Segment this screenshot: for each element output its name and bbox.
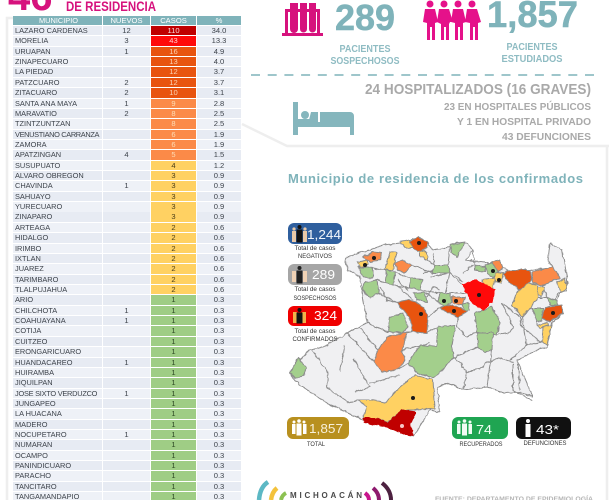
table: casos por municipio: 0.6 [214,264,224,273]
table: casos por municipio: 1 [171,482,176,491]
table: casos por municipio: 43 [169,36,178,45]
table: casos por municipio: 10 [169,88,178,97]
table: casos por municipio: 2 [171,223,176,232]
table: casos por municipio: APATZINGAN [15,150,61,159]
legend: sospechosos: Total de casos [294,286,336,293]
table: casos por municipio: 0.9 [214,181,224,190]
table: casos por municipio: URUAPAN [15,47,51,56]
table: casos por municipio: JUNGAPEO [15,399,56,408]
table: casos por municipio: IRIMBO [15,244,41,253]
table: casos por municipio: 4 [124,150,129,159]
table: casos por municipio: OCAMPO [15,451,48,460]
table: casos por municipio: 0.3 [214,451,224,460]
headline: 46 municipios [8,0,156,16]
table: casos por municipio: 0.3 [214,316,224,325]
stat: 1,857 estudiados [487,0,578,65]
icon: hospital bed [293,102,354,135]
table: casos por municipio: 0.6 [214,254,224,263]
table: casos por municipio: 1 [124,358,129,366]
table: casos por municipio: 13 [169,57,178,66]
badge: total: TOTAL [307,441,325,448]
table: casos por municipio: 1 [171,378,176,387]
table: casos por municipio: 1 [171,368,176,377]
table: casos por municipio: 3.7 [214,78,224,87]
table: casos por municipio: CHAVINDA [15,181,53,190]
table: casos por municipio: LA PIEDAD [15,67,53,76]
table: casos por municipio: 3 [171,171,176,180]
badge: total [287,417,349,448]
table: casos por municipio: 6 [171,130,176,139]
table: casos por municipio: 2 [171,285,176,294]
badge: defunciones: DEFUNCIONES [524,440,566,447]
table: casos por municipio: 1 [171,420,176,429]
table: casos por municipio: HIDALGO [15,233,48,242]
text: hospitalized summary: 43 DEFUNCIONES [502,131,591,143]
table: casos por municipio: NOCUPETARO [15,430,67,439]
table: casos por municipio: ERONGARICUARO [15,347,81,356]
table: casos por municipio: 0.9 [214,212,224,221]
table: casos por municipio: 2 [171,233,176,242]
table: casos por municipio: 0.3 [214,378,224,387]
table: casos por municipio: 0.6 [214,275,224,284]
table header [13,16,241,25]
table: casos por municipio: 1 [171,461,176,470]
stat: 289 sospechosos: PACIENTES [340,43,390,55]
table header: NUEVOS [110,16,143,25]
table: casos por municipio: 34.0 [212,26,226,35]
table: casos por municipio: 1 [171,399,176,408]
table: casos por municipio: 0.3 [214,430,224,439]
table: casos por municipio: 13.3 [212,36,226,45]
table: casos por municipio: 3 [171,212,176,221]
table: casos por municipio: 3.1 [214,88,224,97]
table: casos por municipio: 8 [171,109,176,118]
legend: negativos: 1,244 [307,228,341,242]
table: casos por municipio: 8 [171,119,176,128]
table: casos por municipio: LAZARO CARDENAS [15,26,88,35]
legend: negativos [288,223,342,260]
table: casos por municipio: ZINAPECUARO [15,57,68,66]
table: casos por municipio: PATZCUARO [15,78,59,87]
table: casos por municipio: COAHUAYANA [15,316,66,325]
badge: defunciones [516,417,571,447]
table: casos por municipio: 3 [171,192,176,201]
table: casos por municipio: ZINAPARO [15,212,52,221]
table: casos por municipio: 0.9 [214,202,224,211]
table: casos por municipio: 0.6 [214,244,224,253]
table: casos por municipio: SANTA ANA MAYA [15,99,77,108]
table: casos por municipio: PARACHO [15,471,51,480]
table: casos por municipio: 3 [171,181,176,190]
table: casos por municipio: YURECUARO [15,202,62,211]
table: casos por municipio: 1 [171,409,176,418]
table: casos por municipio: ZITACUARO [15,88,57,97]
table: casos por municipio: SUSUPUATO [15,161,60,170]
table: casos por municipio: HUANDACAREO [15,358,72,366]
table: casos por municipio: 0.9 [214,192,224,201]
table: casos por municipio: 1 [124,47,129,56]
table: casos por municipio: 0.3 [214,306,224,315]
table: casos por municipio: 0.3 [214,461,224,470]
text: hospitalized summary [365,81,591,143]
table: casos por municipio: 12 [122,26,131,35]
table: casos por municipio: 6 [171,140,176,149]
table: casos por municipio: 2 [124,78,129,87]
table: casos por municipio: 1 [171,440,176,449]
table: casos por municipio: MORELIA [15,36,48,45]
legend: confirmados: CONFIRMADOS [292,336,338,343]
table: casos por municipio: 2 [171,264,176,273]
legend: confirmados: 324 [314,309,337,323]
table: casos por municipio: 2 [124,88,129,97]
table: casos por municipio: 1 [124,316,129,325]
icon: four people [423,0,481,40]
table: casos por municipio: 0.3 [214,409,224,418]
table: casos por municipio: 0.3 [214,295,224,304]
table: casos por municipio: 0.3 [214,389,224,398]
table: casos por municipio: 2 [171,244,176,253]
stat: 1,857 estudiados: PACIENTES [506,41,558,53]
table: casos por municipio: 1 [124,99,129,108]
table: casos por municipio: 0.6 [214,223,224,232]
table: casos por municipio: 1 [171,295,176,304]
table: casos por municipio: 2 [124,109,129,118]
legend: negativos: NEGATIVOS [298,253,332,260]
logo: Michoacán [259,482,391,500]
table: casos por municipio: 0.3 [214,471,224,480]
badge: defunciones: 43* [536,422,559,437]
table: casos por municipio: 9 [171,99,176,108]
table: casos por municipio: SAHUAYO [15,192,51,201]
table: casos por municipio: 0.3 [214,482,224,491]
badge: total: 1,857 [309,422,343,436]
table: casos por municipio: 1.9 [214,140,224,149]
table: casos por municipio: TARIMBARO [15,275,58,284]
Lazaro Cardenas in dark red [363,410,416,436]
table: casos por municipio: 2.5 [214,109,224,118]
icon: test tubes [282,3,323,36]
stat: 289 sospechosos: SOSPECHOSOS [330,55,400,67]
table: casos por municipio: 1.5 [214,150,224,159]
table: casos por municipio: ZAMORA [15,140,47,149]
Morelia in red [462,280,495,310]
table: casos por municipio: 2 [171,254,176,263]
legend: confirmados: Total de casos [294,328,336,335]
stat: 1,857 estudiados: ESTUDIADOS [502,53,562,65]
table: casos por municipio: 2.8 [214,99,224,108]
table header: MUNICIPIO [39,16,78,25]
table header: % [216,16,222,25]
table: casos por municipio: 1 [171,326,176,335]
shaded municipalities: green [290,242,558,378]
table: casos por municipio: 0.6 [214,233,224,242]
legend: sospechosos: 289 [312,268,335,282]
table: casos por municipio: 0.9 [214,171,224,180]
table: casos por municipio: CHILCHOTA [15,306,57,315]
table: casos por municipio: 1.9 [214,130,224,139]
table: casos por municipio: 1 [171,451,176,460]
table: casos por municipio: 0.3 [214,399,224,408]
table: casos por municipio: 1 [171,389,176,398]
table: casos por municipio: 16 [169,47,178,56]
shaded municipalities: yellow [358,240,567,422]
legend: confirmados [288,306,342,343]
table: casos por municipio: TANCITARO [15,482,57,491]
table: casos por municipio: MARAVATIO [15,109,57,118]
table: casos por municipio: NUMARAN [15,440,52,449]
table: casos por municipio: TZINTZUNTZAN [15,119,70,128]
municipal boundaries [312,247,560,403]
table: casos por municipio: 2.5 [214,119,224,128]
table: casos por municipio: 1 [171,430,176,439]
map heading: Municipio de residencia de los confirmados [288,171,583,186]
table: casos por municipio: IXTLAN [15,254,41,263]
table: casos por municipio: 4.9 [214,47,224,56]
map: Michoacán municipalities [290,237,567,437]
text: hospitalized summary: Y 1 EN HOSPITAL PRIVADO [457,116,591,128]
table header: CASOS [160,16,187,25]
table: casos por municipio: ARTEAGA [15,223,50,232]
text: hospitalized summary: 23 EN HOSPITALES PÚBLICOS [444,100,591,113]
table: casos por municipio: MADERO [15,420,47,429]
table: casos por municipio: 12 [169,67,178,76]
table: casos por municipio: 5 [171,150,176,159]
table: casos por municipio: JIQUILPAN [15,378,53,387]
table: casos por municipio: 0.3 [214,337,224,346]
table: casos por municipio: 3 [171,202,176,211]
table: casos por municipio: TLALPUJAHUA [15,285,67,294]
table: casos por municipio: 4.0 [214,57,224,66]
table: casos por municipio: PANINDICUARO [15,461,71,470]
shaded municipalities: light orange [363,252,560,372]
table: casos por municipio: 1.2 [214,161,224,170]
table: casos por municipio: CUITZEO [15,337,47,346]
table: casos por municipio: ARIO [15,295,33,304]
table: casos por municipio: 1 [171,471,176,480]
table: casos por municipio: 0.3 [214,347,224,356]
logo: Michoacán: MICHOACÁN [290,491,362,500]
text: hospitalized summary: 24 HOSPITALIZADOS (16 GRAVES) [365,81,591,98]
table: casos por municipio: 0.3 [214,326,224,335]
table: casos por municipio: 1 [171,337,176,346]
table: casos por municipio: 1 [124,181,129,190]
table: casos por municipio: 0.3 [214,420,224,429]
table: casos por municipio: 2 [171,275,176,284]
badge: recuperados [452,417,508,448]
badge: recuperados: 74 [476,422,492,437]
table: casos por municipio: 1 [124,389,129,398]
table: casos por municipio: 1 [171,316,176,325]
table: casos por municipio: 3.7 [214,67,224,76]
table: casos por municipio: 1 [124,306,129,315]
table: casos por municipio: JOSE SIXTO VERDUZCO [15,389,97,398]
badge: recuperados: RECUPERADOS [460,441,502,448]
legend: sospechosos: SOSPECHOSOS [294,295,336,302]
table: casos por municipio: 4 [171,161,176,170]
table: casos por municipio: ALVARO OBREGON [15,171,84,180]
table: casos por municipio: LA HUACANA [15,409,62,418]
table: casos por municipio: 0.3 [214,368,224,377]
table: casos por municipio: 3 [124,36,129,45]
table: casos por municipio: HUIRAMBA [15,368,54,377]
table: casos por municipio: 110 [167,26,180,35]
table: casos por municipio: JUAREZ [15,264,44,273]
table: casos por municipio: 1 [171,306,176,315]
table: casos por municipio: 12 [169,78,178,87]
shaded municipalities: dark orange [397,237,562,333]
state outline [290,238,567,437]
table: casos por municipio: 0.6 [214,285,224,294]
table: casos por municipio: COTIJA [15,326,41,335]
table: casos por municipio: 1 [171,358,176,366]
legend: negativos: Total de casos [294,245,336,252]
table: casos por municipio: 1 [171,347,176,356]
legend: sospechosos [288,264,342,302]
table: casos por municipio: 0.3 [214,358,224,366]
table: casos por municipio: VENUSTIANO CARRANZA [15,130,99,139]
map markers [363,241,555,428]
stat: 289 sospechosos [330,0,400,67]
table: casos por municipio [13,16,241,500]
table: casos por municipio: 0.3 [214,440,224,449]
table: casos por municipio: 1 [124,430,129,439]
